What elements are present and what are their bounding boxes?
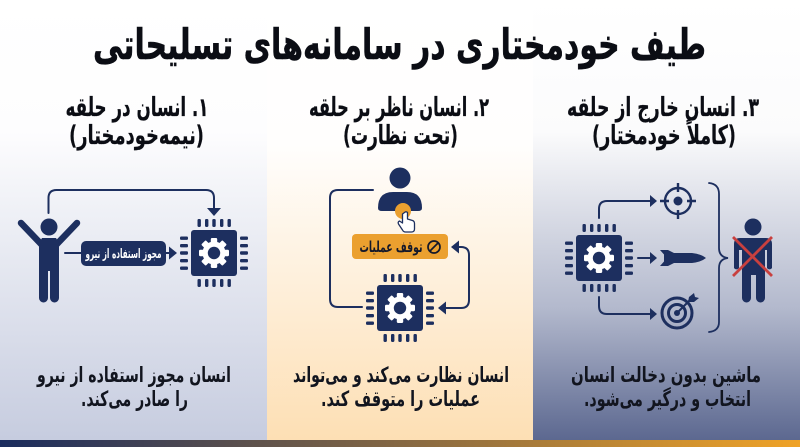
arrow: authorization into chip	[65, 246, 177, 260]
label: use of force authorization: مجوز استفاده از نیرو	[85, 247, 162, 262]
heading: human in the loop: ۱. انسان در حلقه	[66, 93, 208, 123]
button: stop operations	[352, 234, 448, 259]
icon: processor chip	[565, 224, 633, 292]
heading: human out of the loop	[567, 93, 759, 151]
panel: human out of the loop	[533, 0, 800, 440]
arrow: feedback between chip and button	[438, 240, 469, 314]
arrows: chip to three functions	[599, 195, 657, 320]
arrow: person over the top to chip	[48, 190, 221, 216]
icon: crossed-out person	[733, 218, 772, 302]
heading: human on the loop: ۲. انسان ناظر بر حلقه	[309, 93, 489, 123]
text: human on the loop description: انسان نظارت می‌کند و می‌تواند	[293, 363, 509, 387]
heading: human on the loop	[309, 93, 489, 151]
text: human on the loop description: عملیات را متوقف کند.	[321, 387, 480, 411]
icon: crosshair	[660, 183, 696, 219]
bottom gradient bar	[0, 440, 800, 447]
text: human in the loop description: را صادر می‌کند.	[81, 387, 188, 411]
label: use of force authorization	[81, 241, 166, 266]
icon: supervisor pressing button	[378, 168, 422, 232]
arrow: supervisor to chip	[330, 190, 373, 307]
heading: human in the loop	[66, 93, 208, 151]
heading: human on the loop: (تحت نظارت)	[343, 121, 458, 151]
panel: human on the loop	[267, 0, 533, 440]
icon: missile	[660, 250, 706, 266]
heading: human out of the loop: (کاملاً خودمختار)	[592, 118, 736, 151]
icon: processor chip	[180, 219, 248, 287]
brace	[709, 183, 728, 332]
panel: human in the loop	[0, 0, 267, 440]
button: stop operations: توقف عملیات	[360, 238, 422, 256]
text: human on the loop description	[293, 363, 509, 411]
heading: human in the loop: (نیمه‌خودمختار)	[69, 121, 204, 151]
text: human in the loop description: انسان مجوز استفاده از نیرو	[36, 363, 231, 387]
text: human out of the loop description	[571, 363, 761, 411]
icon: person with raised arms	[21, 218, 77, 302]
icon: target with arrow	[662, 293, 699, 328]
text: human in the loop description	[36, 363, 231, 411]
icon: processor chip	[366, 274, 434, 342]
